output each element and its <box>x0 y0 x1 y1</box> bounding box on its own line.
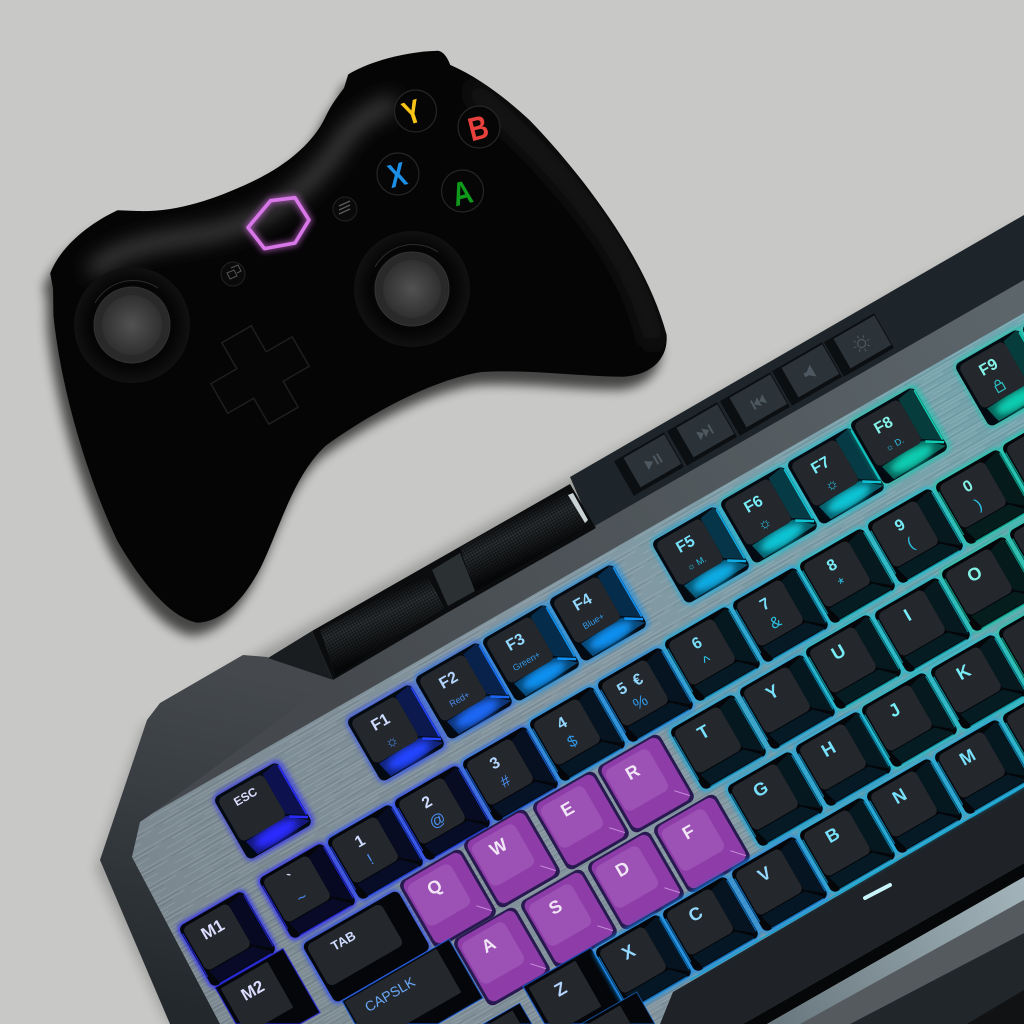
bottom edge keys <box>483 992 655 1024</box>
key 1 <box>323 801 428 904</box>
key 1: ! <box>365 851 377 868</box>
key M <box>930 716 1024 819</box>
roller collar <box>432 553 475 606</box>
key M1: M1 <box>198 916 228 944</box>
key P edge <box>1005 493 1024 596</box>
key U <box>801 611 906 714</box>
key B <box>795 794 900 897</box>
button A <box>442 170 484 214</box>
media key previous <box>720 372 790 436</box>
key F3: Green+ <box>511 649 542 673</box>
key T <box>666 691 771 794</box>
key 5 <box>593 644 698 747</box>
roller lower knurl <box>320 572 444 676</box>
key Z: Z <box>551 978 570 1001</box>
key I: I <box>900 605 915 625</box>
key J <box>857 669 962 772</box>
key backtick: ~ <box>294 888 311 908</box>
top media panel <box>570 215 1024 530</box>
key X <box>591 911 696 1014</box>
key O: O <box>963 562 986 586</box>
button B: B <box>465 109 492 149</box>
key F6: F6 <box>741 493 766 517</box>
gray strip <box>153 280 1024 813</box>
key R purple <box>596 732 696 835</box>
key F10 edge <box>1018 286 1024 393</box>
key F1: ☼ <box>382 731 402 752</box>
status LED dash <box>865 885 890 898</box>
wedge beside roller <box>268 631 333 680</box>
key CAPSLK: CAPSLK <box>362 973 418 1015</box>
key F2: Red+ <box>448 689 471 709</box>
media key brightness <box>824 313 894 377</box>
key D purple: D <box>612 857 633 881</box>
left thumbstick <box>74 267 190 383</box>
game controller <box>44 51 667 636</box>
key Q purple <box>398 847 498 950</box>
key C <box>658 873 763 976</box>
key 7 <box>728 564 833 667</box>
key minus edge <box>998 407 1024 510</box>
key I <box>870 574 975 677</box>
key 4: $ <box>565 732 581 752</box>
key Q purple: Q <box>423 875 446 899</box>
key F9 <box>951 324 1024 431</box>
media keys <box>614 313 894 496</box>
key F5: F5 <box>673 533 698 557</box>
key 7: & <box>767 613 785 633</box>
key R purple: R <box>622 760 643 784</box>
key F3: F3 <box>503 631 528 655</box>
key H: H <box>818 737 839 761</box>
key Y <box>735 651 840 754</box>
key X: X <box>618 941 639 964</box>
key A purple <box>452 905 552 1008</box>
key V: V <box>754 863 775 886</box>
button X: X <box>384 156 411 196</box>
key F2: F2 <box>436 669 461 693</box>
key 6 <box>660 603 765 706</box>
key 3: # <box>498 772 514 792</box>
palm rest corner <box>967 990 1024 1024</box>
key 6: ^ <box>700 652 716 671</box>
keyboard shadow <box>96 222 1024 1024</box>
roller underlay <box>312 484 596 680</box>
button Y: Y <box>398 93 426 133</box>
brushed metal plate <box>132 313 1024 1024</box>
key M: M <box>956 745 979 770</box>
QWERTY key row <box>299 493 1024 1006</box>
function key row <box>210 286 1024 864</box>
controller drop shadow <box>44 64 661 636</box>
roller upper <box>460 490 591 592</box>
key F4: Blue+ <box>581 611 606 631</box>
roller upper knurl <box>460 490 591 592</box>
ZXCV key row <box>215 677 1024 1024</box>
key 9: 9 <box>892 516 908 535</box>
key F5: ☼ M. <box>685 554 708 573</box>
key V <box>727 833 832 936</box>
key W purple: W <box>486 834 511 860</box>
space bar panel <box>660 787 1024 1024</box>
key F7: F7 <box>808 454 833 478</box>
key M2: M2 <box>238 977 268 1005</box>
button B <box>458 106 500 149</box>
key F6: ☼ <box>755 513 775 534</box>
key TAB <box>299 887 434 1006</box>
media key mute <box>772 342 842 406</box>
key L edge <box>994 592 1024 695</box>
key comma edge <box>998 677 1024 780</box>
key 5: 5 <box>614 680 631 699</box>
key U: U <box>828 640 849 664</box>
key Z <box>523 948 628 1024</box>
key F8: F8 <box>871 414 896 438</box>
key 2: @ <box>426 810 449 832</box>
key B: B <box>822 823 843 847</box>
key G: G <box>749 777 772 801</box>
ASDF key row <box>175 592 1024 1024</box>
key A purple: A <box>478 933 499 957</box>
key 0: ) <box>972 496 985 514</box>
key F2 <box>411 637 519 744</box>
controller surface highlights <box>92 88 655 345</box>
key 2: 2 <box>419 793 435 812</box>
key C: C <box>685 902 706 926</box>
key F4: F4 <box>570 591 595 615</box>
key F9: F9 <box>976 356 1001 380</box>
button X <box>377 153 419 196</box>
light ring outline <box>248 198 309 249</box>
right thumbstick <box>354 231 470 347</box>
controller body <box>50 51 667 623</box>
key 7: 7 <box>757 595 773 614</box>
volume roller <box>320 490 591 676</box>
key 8 <box>795 525 900 628</box>
key F8: ☼ D. <box>883 435 906 454</box>
lower bar and front edge <box>660 786 1024 1024</box>
keyboard <box>96 215 1024 1024</box>
key K: K <box>953 660 974 684</box>
key F8 <box>846 382 954 489</box>
key S purple: S <box>545 896 566 919</box>
key 8: * <box>836 575 850 593</box>
key F5 <box>648 501 756 608</box>
key T: T <box>694 721 713 744</box>
silver strip <box>767 877 1024 1024</box>
media key play <box>614 432 684 496</box>
share button <box>221 262 245 286</box>
key TAB: TAB <box>328 928 358 954</box>
key E purple: E <box>557 798 578 821</box>
key F purple: F <box>679 821 698 844</box>
key 9: ( <box>904 535 918 553</box>
button Y <box>394 90 436 133</box>
key H <box>791 708 896 811</box>
gray strip <box>800 900 1024 1024</box>
key M2 <box>215 948 320 1024</box>
key CAPSLK <box>342 939 483 1024</box>
key ESC <box>210 757 318 864</box>
key 0 <box>931 446 1024 549</box>
key M1 <box>175 888 280 991</box>
key 3: 3 <box>487 754 503 773</box>
key W purple <box>462 807 562 910</box>
key 3 <box>458 723 563 826</box>
key backtick <box>255 840 360 943</box>
key S purple <box>519 867 619 970</box>
key F purple <box>652 792 752 895</box>
key D purple <box>586 829 686 932</box>
menu button <box>333 197 357 221</box>
key F3 <box>478 599 586 706</box>
key F1: F1 <box>368 711 393 735</box>
key 2 <box>390 762 495 865</box>
key O <box>937 533 1024 636</box>
key 5: € <box>630 671 646 690</box>
media key next <box>667 402 737 466</box>
key 8: 8 <box>824 556 840 575</box>
key E purple <box>531 769 631 872</box>
key 9 <box>863 485 968 588</box>
key F7: ☼ <box>822 474 842 495</box>
key J: J <box>885 699 904 721</box>
keyboard body left chamfer <box>100 280 1024 1024</box>
key F1 <box>343 679 451 786</box>
glow line along bar <box>690 786 1024 980</box>
key F7 <box>783 422 891 529</box>
key G <box>723 748 828 851</box>
key 6: 6 <box>689 634 705 653</box>
light ring glow <box>248 198 309 249</box>
d-pad <box>196 311 324 439</box>
key 1: 1 <box>352 832 368 851</box>
key 4: 4 <box>554 714 570 733</box>
key 5: % <box>630 692 651 714</box>
palm rest <box>850 933 1024 1024</box>
key ESC: ESC <box>231 784 260 809</box>
key Y: Y <box>762 681 783 704</box>
key F4 <box>545 559 653 666</box>
number key row <box>255 407 1024 943</box>
key F6 <box>716 461 824 568</box>
button A: A <box>449 174 476 214</box>
key 0: 0 <box>960 477 976 496</box>
roller lower <box>320 572 444 676</box>
key K <box>926 631 1024 734</box>
key backtick: ` <box>285 871 298 889</box>
key N: N <box>889 784 910 808</box>
roller silver end <box>568 493 588 523</box>
key N <box>862 755 967 858</box>
black band <box>743 863 1024 1024</box>
key 4 <box>525 683 630 786</box>
